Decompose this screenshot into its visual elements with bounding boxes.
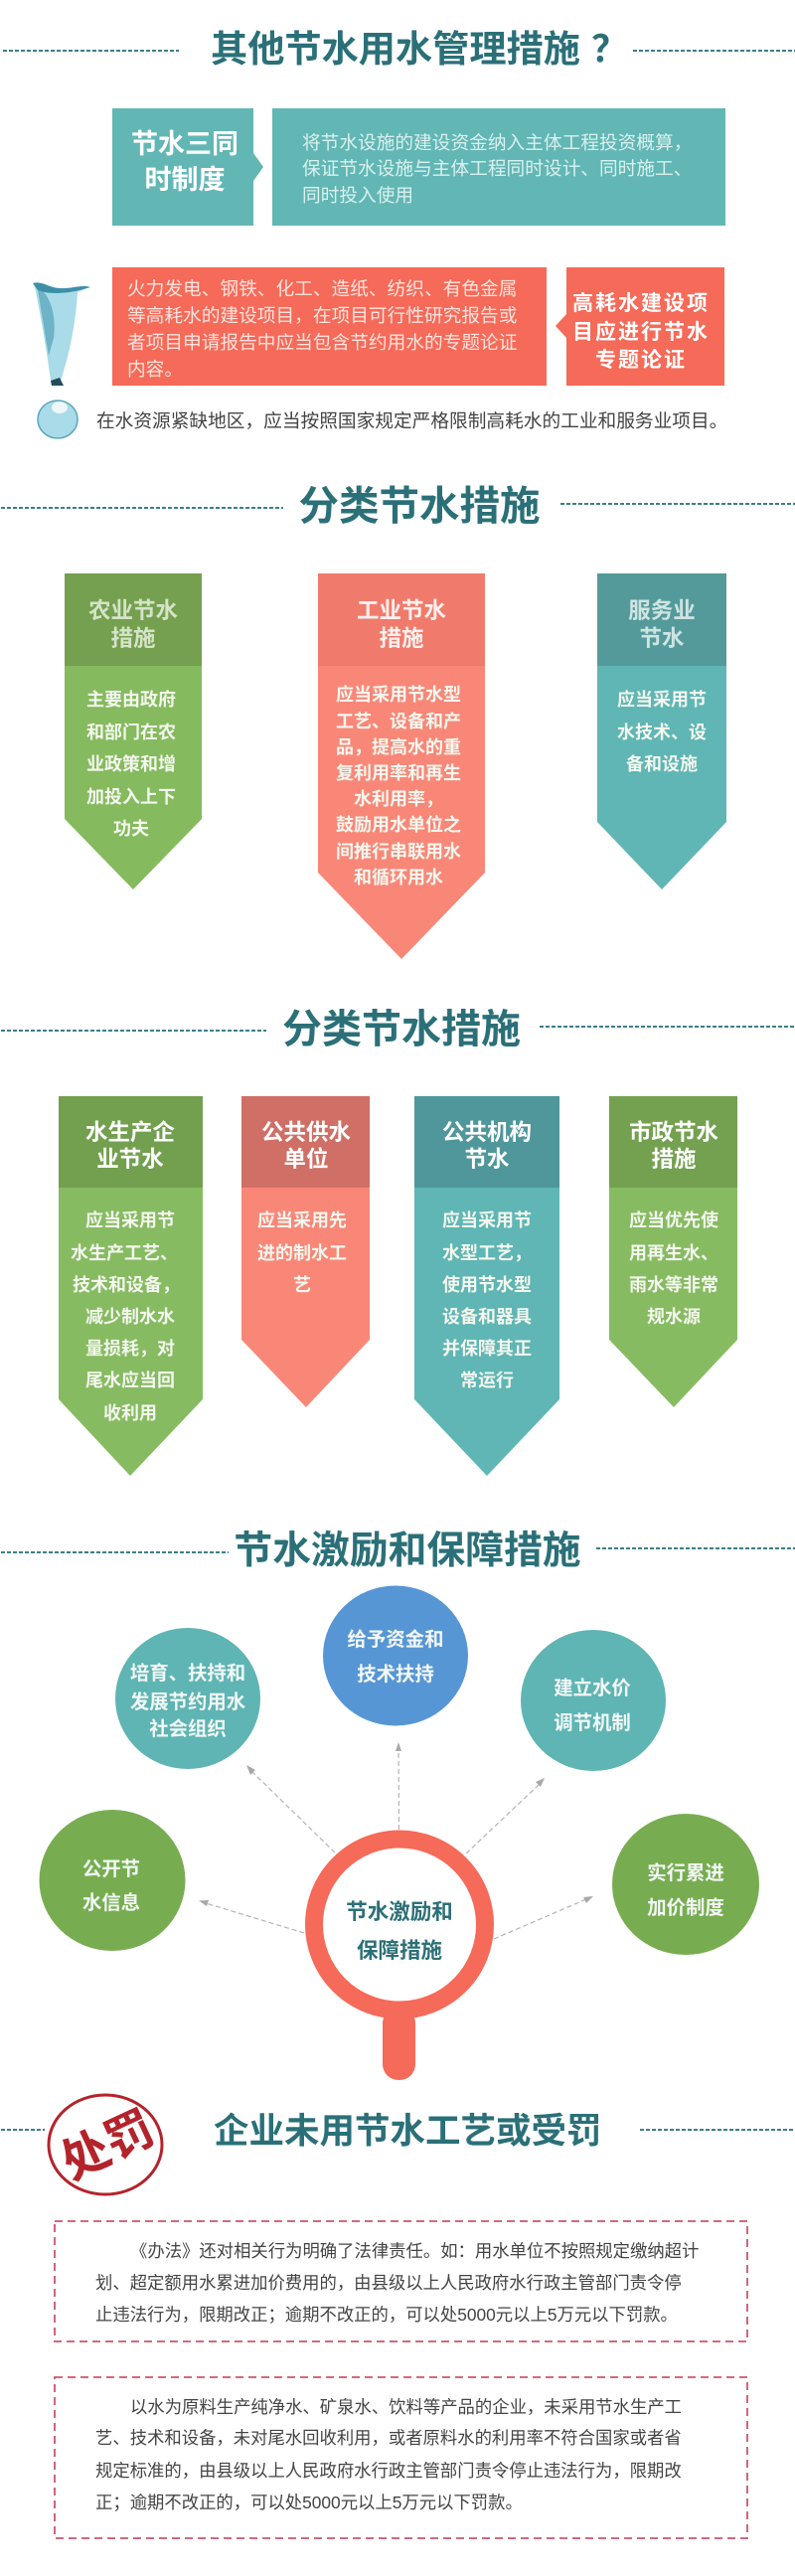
pennant: public water supply: 应当采用先 (257, 1209, 347, 1230)
circle: social organizations (115, 1628, 260, 1769)
panel: penalty text 2 (55, 2377, 747, 2538)
icon: water splash exclamation mark (33, 282, 90, 386)
pennant: public institutions: 设备和器具 (442, 1307, 532, 1327)
pennant: public water supply (241, 1096, 370, 1407)
arrow: up (396, 1742, 401, 1830)
panel: three simultaneous description: 同时投入使用 (302, 185, 413, 206)
panel: penalty text 1: 止违法行为，限期改正；逾期不改正的，可以处5000元以上5万元以下罚款。 (95, 2305, 678, 2325)
circle: public information: 公开节 (82, 1858, 140, 1880)
pennant: public institutions: 并保障其正 (442, 1338, 532, 1359)
pennant: public institutions: 使用节水型 (442, 1275, 532, 1295)
panel: penalty text 1: 《办法》还对相关行为明确了法律责任。如：用水单位不按照规定缴纳超计 (130, 2241, 699, 2261)
pennant: industry: 鼓励用水单位之 (336, 814, 461, 835)
panel: high water use industries: 内容。 (127, 359, 183, 380)
pennant: public water supply: 艺 (293, 1275, 311, 1295)
pennant: water production enterprises: 业节水 (96, 1147, 164, 1172)
pennant: services: 服务业 (628, 598, 696, 623)
pennant: industry: 复利用率和再生 (336, 763, 461, 783)
icon: penalty stamp: 处罚 (54, 2102, 162, 2190)
panel: high water use industries: 者项目申请报告中应当包含节约用水的专题论证 (127, 332, 517, 353)
pennant: public water supply: 单位 (283, 1146, 329, 1172)
arrow: upper left (246, 1765, 335, 1852)
circle: funding and technical support: 技术扶持 (357, 1664, 434, 1686)
pennant: municipal: 规水源 (647, 1307, 701, 1327)
circle: progressive pricing: 加价制度 (647, 1896, 724, 1919)
panel: three simultaneous system label: 节水三同 (131, 129, 238, 159)
pennant: industry: 水利用率， (354, 789, 443, 809)
pennant: public institutions: 公共机构 (442, 1120, 532, 1145)
panel: penalty text 2: 艺、技术和设备，未对尾水回收利用，或者原料水的利用率不符合国家或者省 (95, 2428, 682, 2448)
pennant: public water supply: 进的制水工 (257, 1243, 347, 1263)
panel: penalty text 1: 划、超定额用水累进加价费用的，由县级以上人民政府水行政主管部门责令停 (95, 2273, 682, 2293)
panel: special demonstration label: 目应进行节水 (572, 320, 710, 344)
panel: high water use industries: 火力发电、钢铁、化工、造纸、纺织、有色金属 (127, 278, 517, 299)
pennant: services: 应当采用节 (617, 689, 707, 710)
pennant: agriculture: 措施 (110, 626, 156, 651)
pennant: agriculture: 主要由政府 (86, 689, 176, 710)
pennant: industry: 工艺、设备和产 (336, 712, 461, 731)
circle: funding and technical support (323, 1586, 468, 1725)
panel: special demonstration label (556, 267, 724, 386)
section heading: other measures: 其他节水用水管理措施 (211, 28, 580, 70)
pennant: water production enterprises: 尾水应当回 (85, 1369, 175, 1390)
panel: penalty text 2: 以水为原料生产纯净水、矿泉水、饮料等产品的企业，未采用节水生产工 (130, 2397, 682, 2417)
pennant: municipal: 措施 (651, 1147, 697, 1172)
panel: three simultaneous description (272, 108, 725, 226)
pennant: agriculture: 农业节水 (88, 598, 178, 623)
pennant: services: 水技术、设 (617, 723, 707, 742)
circle: public information: 水信息 (82, 1891, 140, 1914)
panel: three simultaneous description: 保证节水设施与主体工程同时设计、同时施工、 (302, 158, 692, 179)
pennant: industry: 工业节水 (357, 598, 446, 623)
pennant: public institutions: 应当采用节 (442, 1209, 532, 1230)
pennant: public institutions (414, 1096, 559, 1476)
arrow: right (494, 1896, 593, 1939)
magnifier centre: 节水激励和 (346, 1900, 453, 1924)
pennant: water production enterprises: 技术和设备， (73, 1275, 180, 1295)
pennant: municipal: 用再生水、 (629, 1243, 718, 1263)
magnifier centre: 保障措施 (357, 1939, 442, 1963)
panel: three simultaneous system label (112, 108, 263, 226)
section heading: classified measures 1: 分类节水措施 (298, 483, 541, 529)
panel: penalty text 1 (55, 2221, 747, 2341)
pennant: water production enterprises: 减少制水水 (85, 1307, 175, 1327)
circle: water price mechanism: 调节机制 (554, 1712, 631, 1734)
text: water scarce regions: 在水资源紧缺地区，应当按照国家规定严格限制高耗水的工业和服务业项目。 (96, 410, 727, 431)
circle: water price mechanism: 建立水价 (554, 1677, 631, 1699)
panel: high water use industries: 等高耗水的建设项目，在项目可行性研究报告或 (127, 305, 517, 326)
panel: penalty text 2: 正；逾期不改正的，可以处5000元以上5万元以下罚款。 (95, 2493, 523, 2512)
pennant: public institutions: 水型工艺， (442, 1243, 532, 1263)
pennant: water production enterprises (59, 1096, 203, 1476)
pennant: municipal: 市政节水 (629, 1119, 718, 1145)
panel: high water use industries (112, 267, 547, 386)
circle: social organizations: 社会组织 (149, 1717, 227, 1740)
pennant: municipal: 应当优先使 (629, 1209, 718, 1230)
section heading: incentives: 节水激励和保障措施 (234, 1530, 581, 1572)
pennant: public water supply: 公共供水 (261, 1120, 351, 1145)
pennant: agriculture: 业政策和增 (86, 754, 176, 774)
panel: special demonstration label: 高耗水建设项 (572, 291, 710, 315)
section heading: classified measures 2: 分类节水措施 (282, 1008, 521, 1051)
panel: three simultaneous system label: 时制度 (145, 165, 225, 195)
circle: public information (40, 1810, 185, 1951)
pennant: services: 备和设施 (626, 754, 698, 774)
panel: special demonstration label: 专题论证 (595, 349, 687, 372)
magnifier centre (314, 1839, 485, 2080)
pennant: industry: 措施 (379, 626, 424, 651)
pennant: public institutions: 常运行 (460, 1370, 514, 1390)
pennant: municipal: 雨水等非常 (629, 1274, 718, 1295)
circle: social organizations: 发展节约用水 (130, 1690, 246, 1713)
pennant: municipal (609, 1096, 737, 1407)
pennant: agriculture (65, 573, 202, 889)
pennant: industry: 应当采用节水型 (336, 684, 461, 705)
circle: funding and technical support: 给予资金和 (348, 1628, 443, 1651)
pennant: industry: 间推行串联用水 (336, 842, 461, 862)
circle: social organizations: 培育、扶持和 (130, 1662, 245, 1685)
pennant: services: 节水 (639, 626, 685, 651)
pennant: water production enterprises: 水生产企 (85, 1120, 175, 1145)
icon: water drop circle (38, 401, 78, 438)
pennant: agriculture: 和部门在农 (86, 722, 176, 742)
pennant: industry (318, 573, 485, 959)
arrow: left (199, 1900, 304, 1933)
pennant: industry: 品，提高水的重 (336, 736, 461, 757)
pennant: services (597, 573, 726, 889)
pennant: public institutions: 节水 (464, 1147, 510, 1172)
section heading: penalties: 企业未用节水工艺或受罚 (214, 2111, 602, 2151)
pennant: industry: 和循环用水 (354, 868, 443, 887)
pennant: water production enterprises: 应当采用节 (85, 1209, 175, 1230)
circle: progressive pricing: 实行累进 (647, 1861, 724, 1884)
panel: penalty text 2: 规定标准的，由县级以上人民政府水行政主管部门责令停止违法行为，限期改 (95, 2461, 682, 2481)
arrow: upper right (466, 1778, 545, 1853)
circle: progressive pricing (612, 1814, 759, 1955)
pennant: agriculture: 加投入上下 (86, 787, 176, 807)
pennant: agriculture: 功夫 (113, 819, 149, 839)
pennant: water production enterprises: 水生产工艺、 (71, 1243, 178, 1263)
panel: three simultaneous description: 将节水设施的建设资金纳入主体工程投资概算， (302, 132, 692, 153)
circle: water price mechanism (521, 1630, 666, 1771)
pennant: water production enterprises: 量损耗，对 (85, 1339, 175, 1359)
section heading: other measures: ？ (591, 28, 628, 70)
section heading: other measures (3, 28, 795, 70)
pennant: water production enterprises: 收利用 (103, 1403, 157, 1423)
